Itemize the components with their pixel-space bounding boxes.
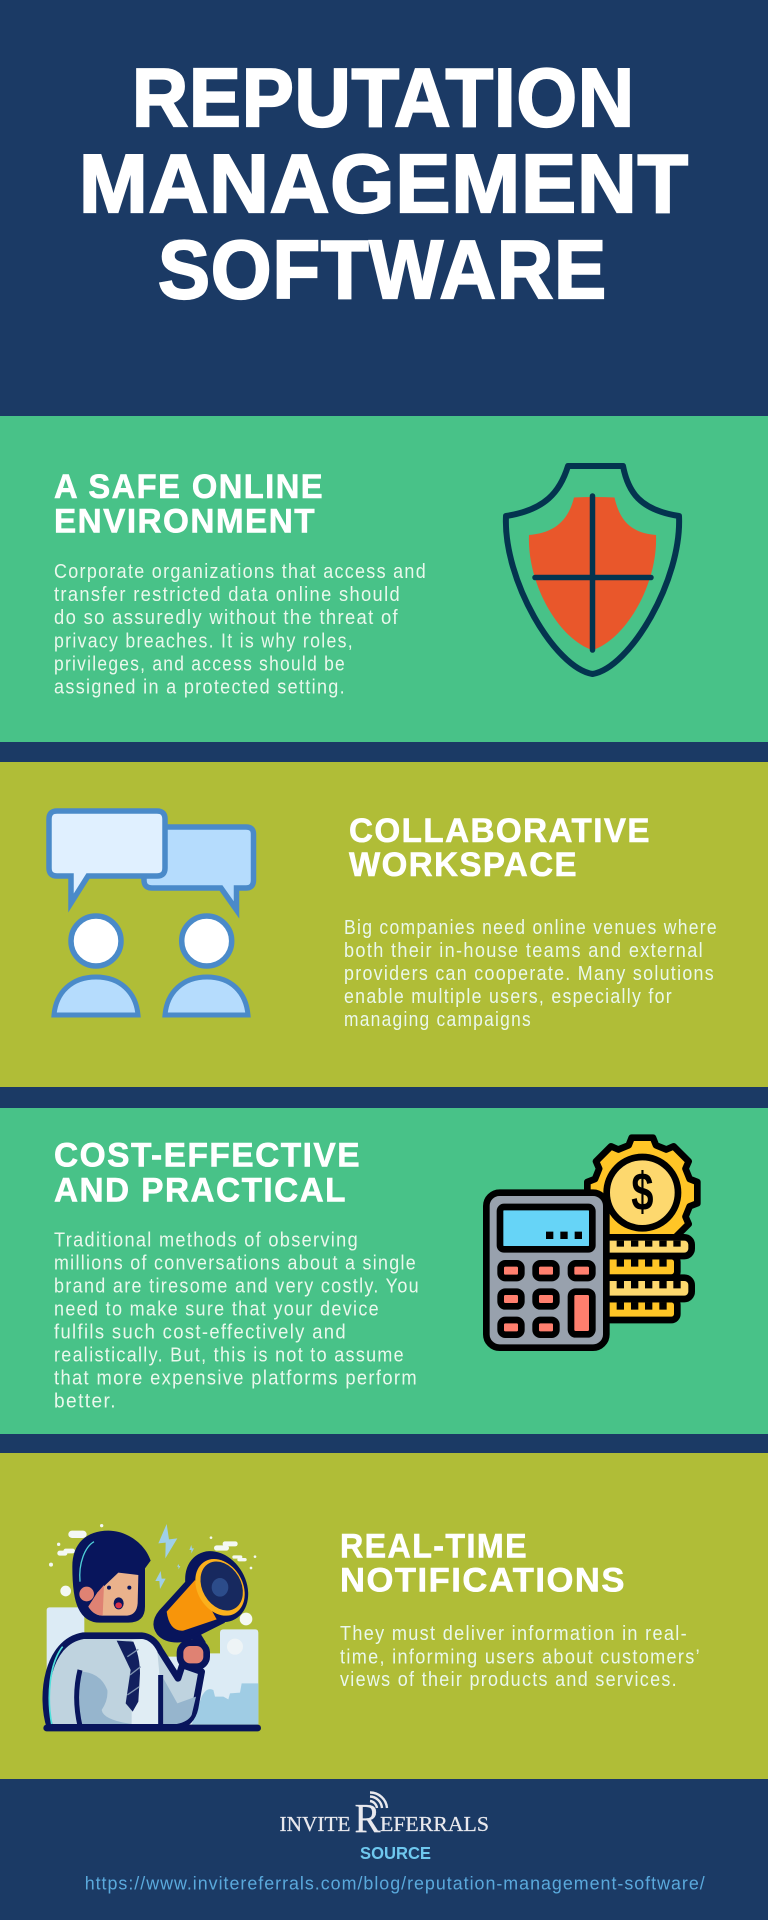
text block: collaborative workspace description bbox=[344, 916, 718, 1031]
icon part: clouds and dots bbox=[49, 1524, 256, 1655]
panel background: green bbox=[0, 416, 768, 742]
text block: real-time description: They must deliver information in real- bbox=[340, 1622, 688, 1645]
icon part: lightning bolts bbox=[155, 1524, 194, 1589]
heading: real-time notifications: NOTIFICATIONS bbox=[340, 1562, 626, 1600]
heading: collaborative workspace bbox=[349, 812, 651, 884]
logo: invite referrals bbox=[280, 1792, 489, 1841]
icon: calculator with gear and coins bbox=[486, 1138, 697, 1348]
icon part: torso bbox=[46, 1636, 202, 1727]
text block: safe environment description: transfer restricted data online should bbox=[54, 583, 401, 606]
icon: shield bbox=[506, 466, 679, 674]
text block: cost-effective description: Traditional methods of observing bbox=[54, 1229, 359, 1252]
icon part: head bbox=[72, 1531, 151, 1623]
text block: safe environment description: privacy breaches. It is why roles, bbox=[54, 630, 354, 652]
logo: invite referrals: EFERRALS bbox=[380, 1812, 489, 1836]
text block: collaborative workspace description: enable multiple users, especially for bbox=[344, 985, 673, 1008]
source url: https://www.invitereferrals.com/blog/reputation-management-software/ bbox=[85, 1873, 706, 1893]
text block: safe environment description: do so assuredly without the threat of bbox=[54, 606, 399, 629]
icon part: gear bbox=[587, 1138, 697, 1239]
heading: a safe online environment bbox=[54, 468, 324, 540]
icon part: hand bbox=[180, 1643, 207, 1667]
icon part: calculator bbox=[486, 1193, 606, 1348]
title bbox=[79, 51, 689, 316]
heading: collaborative workspace: COLLABORATIVE bbox=[349, 812, 651, 850]
icon part: city background bbox=[47, 1607, 258, 1725]
text block: cost-effective description: realistically. But, this is not to assume bbox=[54, 1344, 405, 1367]
text block: cost-effective description: millions of conversations about a single bbox=[54, 1252, 417, 1275]
icon part: coin stack bbox=[600, 1237, 692, 1320]
panel: real-time notifications bbox=[0, 1453, 768, 1779]
title: MANAGEMENT bbox=[79, 137, 689, 230]
icon: man with megaphone bbox=[43, 1524, 261, 1731]
heading: collaborative workspace: WORKSPACE bbox=[349, 846, 578, 884]
text block: safe environment description: assigned in a protected setting. bbox=[54, 676, 346, 699]
heading: real-time notifications bbox=[340, 1528, 626, 1600]
text block: cost-effective description: need to make sure that your device bbox=[54, 1298, 380, 1321]
source label: SOURCE bbox=[360, 1843, 431, 1863]
panel background: olive bbox=[0, 762, 768, 1087]
logo: invite referrals: INVITE bbox=[280, 1812, 350, 1836]
heading: a safe online environment: ENVIRONMENT bbox=[54, 502, 316, 540]
title: SOFTWARE bbox=[158, 223, 607, 316]
text block: cost-effective description: fulfils such cost-effectively and bbox=[54, 1321, 347, 1344]
icon: two people chatting bbox=[49, 811, 254, 1015]
text block: real-time description: views of their products and services. bbox=[340, 1668, 678, 1691]
text block: safe environment description: Corporate organizations that access and bbox=[54, 560, 427, 583]
heading: real-time notifications: REAL-TIME bbox=[340, 1528, 528, 1566]
heading: cost-effective and practical: AND PRACTICAL bbox=[54, 1172, 347, 1210]
panel background: green bbox=[0, 1108, 768, 1434]
icon part: desk line bbox=[43, 1725, 261, 1731]
footer bbox=[85, 1792, 706, 1893]
panel: a safe online environment bbox=[0, 416, 768, 742]
logo: invite referrals: R bbox=[354, 1795, 381, 1841]
text block: real-time description: time, informing users about customers’ bbox=[340, 1645, 701, 1668]
text block: cost-effective description: brand are tiresome and very costly. You bbox=[54, 1275, 420, 1298]
text block: cost-effective description: better. bbox=[54, 1390, 117, 1413]
panel background: olive bbox=[0, 1453, 768, 1779]
panel: cost-effective and practical bbox=[0, 1108, 768, 1434]
text block: collaborative workspace description: both their in-house teams and external bbox=[344, 939, 704, 962]
text block: collaborative workspace description: managing campaigns bbox=[344, 1008, 532, 1031]
text block: safe environment description bbox=[54, 560, 427, 699]
text block: safe environment description: privileges, and access should be bbox=[54, 652, 346, 676]
heading: a safe online environment: A SAFE ONLINE bbox=[54, 468, 324, 506]
title: REPUTATION bbox=[132, 51, 635, 144]
icon part: megaphone bbox=[155, 1540, 261, 1645]
icon part: dollar coin bbox=[607, 1157, 678, 1228]
heading: cost-effective and practical bbox=[54, 1136, 361, 1210]
text block: cost-effective description: that more expensive platforms perform bbox=[54, 1367, 418, 1390]
heading: cost-effective and practical: COST-EFFECTIVE bbox=[54, 1136, 361, 1174]
icon part: dollar coin: $ bbox=[631, 1161, 653, 1221]
text block: collaborative workspace description: Big companies need online venues where bbox=[344, 916, 718, 939]
text block: cost-effective description bbox=[54, 1229, 420, 1413]
text block: real-time description bbox=[340, 1622, 701, 1691]
panel: collaborative workspace bbox=[0, 762, 768, 1087]
text block: collaborative workspace description: providers can cooperate. Many solutions bbox=[344, 962, 715, 985]
